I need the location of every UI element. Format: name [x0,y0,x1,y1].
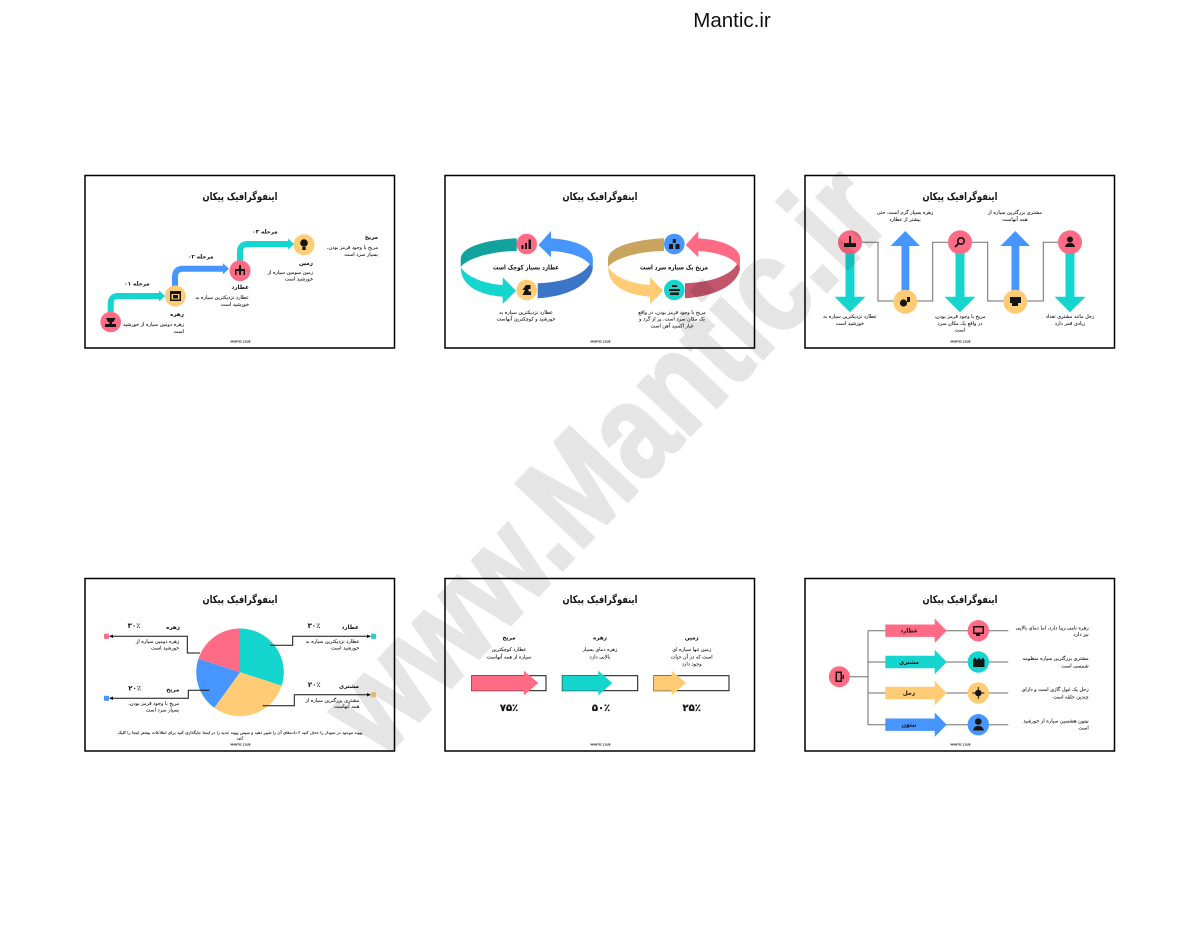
watermark: www.Mantic.ir [292,137,915,782]
text: venus: است [174,329,184,335]
panel: pie chart [85,578,394,751]
text: bottom mercury: عطارد نزدیکترین سیاره به [823,314,877,320]
text: jupiter row: شمسی است [1061,664,1089,670]
text: mercury: ۳۰٪ [308,622,320,630]
arrow: saturn: زحل [903,691,915,697]
footer mark: MANTIC.CLUB [591,340,610,344]
arrow: down 2 [944,250,976,312]
note text: پیوند موجود در نمودار را حذف کنید ۲ داده‌های آن را تغییر دهید و سپس پیوند جدید را در اینجا جایگذاری کنید برای اطلاعات بیشتر اینجا را کلیک [118,730,363,735]
arrow: up 2 [1000,231,1030,292]
panel: tree of arrows [805,578,1114,751]
icon: left loop top [516,234,537,254]
arrow: down 3 [1054,250,1086,312]
icon: right loop top [664,234,685,254]
pie chart [196,628,284,716]
text: top venus [877,209,934,223]
leader: jupiter [263,692,376,706]
text: mercury row: زهره نامی زیبا دارد، اما دمای بالایی [1016,626,1089,632]
text: mercury: خورشید است [331,646,359,652]
text: left loop description [497,310,555,322]
arrow: step 2 [175,263,229,288]
text: top venus: زهره بسیار گرم است، حتی [877,209,934,216]
footer mark: MANTIC.CLUB [951,742,970,746]
title: اینفوگرافیک پیکان [922,190,998,203]
text: earth: زمین [299,261,313,267]
column: mars: ۷۵٪ [500,703,518,714]
text: mars: بسیار سرد است [344,252,378,258]
icon: pink circle 3 [1058,230,1082,254]
text: bottom saturn [1046,314,1095,327]
text: top jupiter [987,209,1042,223]
icon: yellow circle 2 [1003,290,1027,314]
leader: mars [104,690,209,701]
label: step 3: مرحله ۰۳ [252,230,278,236]
leader: mercury [270,634,376,645]
icon: pink circle 1 [838,230,862,254]
text: mars: بسیار سرد است [146,708,179,714]
text: right loop description [638,310,706,330]
icon: step 2 browser [165,286,186,306]
text: neptune row [1023,718,1089,732]
arrow: neptune [885,712,947,737]
text: right loop description: یک مکان سرد است. پر از گرد و [638,316,706,322]
text: venus: زهره دومین سیاره از [135,639,180,645]
text: mars [128,684,180,714]
icon: step 1 person [100,312,121,332]
icon: left loop bottom [516,280,537,300]
text: bottom mars: در واقع یک مکان سرد [938,321,982,327]
text: mercury row: نیز دارد [1073,632,1089,638]
title: اینفوگرافیک پیکان [922,593,998,606]
column: venus: زهره دمای بسیار [582,647,618,653]
text: left loop description: خورشید و کوچکترین آنهاست [497,316,555,322]
column: earth: زمین تنها سیاره ای [672,647,712,653]
text: mercury row [1016,626,1089,638]
text: earth [267,261,314,282]
text: bottom mars [934,314,986,334]
arrow: mercury: عطارد [900,629,918,635]
column: venus: ۵۰٪ [592,703,610,714]
text: bottom mercury: خورشید است [836,321,864,327]
arrow: step 3 [240,238,294,262]
text: jupiter: مشتری [339,684,360,690]
label: step 1: مرحله ۰۱ [124,282,150,288]
arrow: jupiter: مشتری [899,660,920,666]
footer mark: MANTIC.CLUB [231,742,250,746]
icon: yellow circle 1 [893,290,917,314]
arrow: jupiter [885,650,947,674]
panel: circular arrows [445,176,754,348]
text: jupiter: مشتری بزرگترین سیاره از [304,697,360,704]
arrow: saturn [885,681,947,705]
text: neptune row: نپتون هشتمین سیاره از خورشید [1023,718,1089,724]
text: venus: زهره دومین سیاره از خورشید [123,322,185,328]
note text [118,730,363,740]
title: اینفوگرافیک پیکان [562,593,638,606]
column: mars: سیاره از همه آنهاست [487,654,531,660]
text: left loop description: عطارد نزدیکترین سیاره به [499,310,553,316]
icon: root [829,666,850,687]
arrow: step 1 [111,290,165,314]
icon: pink circle 2 [948,230,972,254]
text: top jupiter: همه آنهاست [1002,216,1028,223]
arrow: mercury [885,618,947,643]
label: step 2: مرحله ۰۲ [188,254,214,260]
icon: step 4 bulb [294,234,314,255]
icon: step 3 team [230,260,250,281]
column: earth: زمین [685,636,699,642]
text: mars [327,235,379,258]
label: right loop centre: مریخ یک سیاره سرد است [640,264,708,272]
connector line [850,242,1070,301]
footer mark: MANTIC.CLUB [231,340,250,344]
text: mars: مریخ با وجود قرمز بودن، [327,245,378,251]
text: mercury: عطارد نزدیکترین سیاره به [195,295,249,301]
site heading: Mantic.ir [693,9,771,32]
text: top jupiter: مشتری بزرگترین سیاره از [987,209,1042,216]
text: mars: ۲۰٪ [128,684,141,692]
text: mars: مریخ [365,235,379,241]
column: venus [562,636,638,714]
text: top venus: بیشتر از عطارد [889,217,921,223]
icon: neptune [968,714,989,735]
text: mercury [195,285,249,308]
text: saturn row [1022,686,1089,700]
icon: right loop bottom [664,280,685,300]
text: mercury: عطارد نزدیکترین سیاره به [306,639,359,645]
text: venus [128,622,180,652]
icon: saturn [968,682,989,704]
text: jupiter row [1023,655,1089,670]
chart: left loop arrows [461,231,593,304]
text: mercury: عطارد [342,625,359,631]
column: earth [654,636,729,714]
column: mars [472,636,546,714]
column: mars: مریخ [502,636,516,642]
text: jupiter: همه آنهاست [334,703,360,710]
column: earth: است که در آن حیات [671,654,713,660]
text: mercury: خورشید است [221,302,249,308]
text: venus [123,312,185,335]
label: left loop centre: عطارد بسیار کوچک است [493,264,559,272]
column: mars: عطارد کوچکترین [492,647,526,653]
leader: venus [104,634,200,653]
text: saturn row: چندین حلقه است [1053,694,1089,700]
arrow: neptune: نپتون [902,723,916,729]
arrow: up 1 [890,231,920,292]
text: mars: مریخ با وجود قرمز بودن، [128,701,180,707]
icon: mercury [968,620,989,641]
text: right loop description: مریخ با وجود قرمز بودن، در واقع [638,310,706,316]
text: right loop description: غبار اکسید آهن است [651,322,694,330]
text: bottom mars: است [955,328,965,334]
text: jupiter [304,681,360,710]
text: bottom saturn: زیادی قمر دارد [1055,321,1086,327]
title: اینفوگرافیک پیکان [562,190,638,203]
text: venus: زهره [170,312,184,318]
text: jupiter: ۲۰٪ [308,681,321,689]
footer mark: MANTIC.CLUB [591,742,610,746]
panel: progress arrows [445,578,754,751]
footer mark: MANTIC.CLUB [951,340,970,344]
title: اینفوگرافیک پیکان [202,593,278,606]
text: mercury [306,622,359,652]
text: earth: زمین سومین سیاره از [267,270,314,276]
note text: کنید [237,736,243,740]
text: bottom mars: مریخ با وجود قرمز بودن، [934,314,986,320]
text: jupiter row: مشتری بزرگترین سیاره منظومه [1023,655,1089,662]
column: earth: وجود دارد [682,662,702,668]
text: venus: ۳۰٪ [128,622,140,630]
text: neptune row: است [1078,726,1089,732]
title: اینفوگرافیک پیکان [202,190,278,203]
chart: right loop arrows [608,231,740,304]
panel: up and down arrows [805,176,1114,348]
column: venus: بالایی دارد [590,654,610,660]
text: mars: مریخ [166,688,180,694]
text: earth: خورشید است [285,276,313,282]
column: earth: ۲۵٪ [683,703,701,714]
column: venus: زهره [593,636,607,642]
text: bottom saturn: زحل مانند مشتری تعداد [1046,314,1095,320]
text: saturn row: زحل یک غول گازی است و دارای [1022,686,1089,693]
text: venus: زهره [166,625,180,631]
text: mercury: عطارد [232,285,249,291]
text: venus: خورشید است [151,646,179,652]
text: bottom mercury [823,314,877,327]
icon: jupiter [968,651,989,673]
panel: staircase arrows [85,176,394,348]
arrow: down 1 [834,250,866,312]
connector tree [839,631,1008,725]
